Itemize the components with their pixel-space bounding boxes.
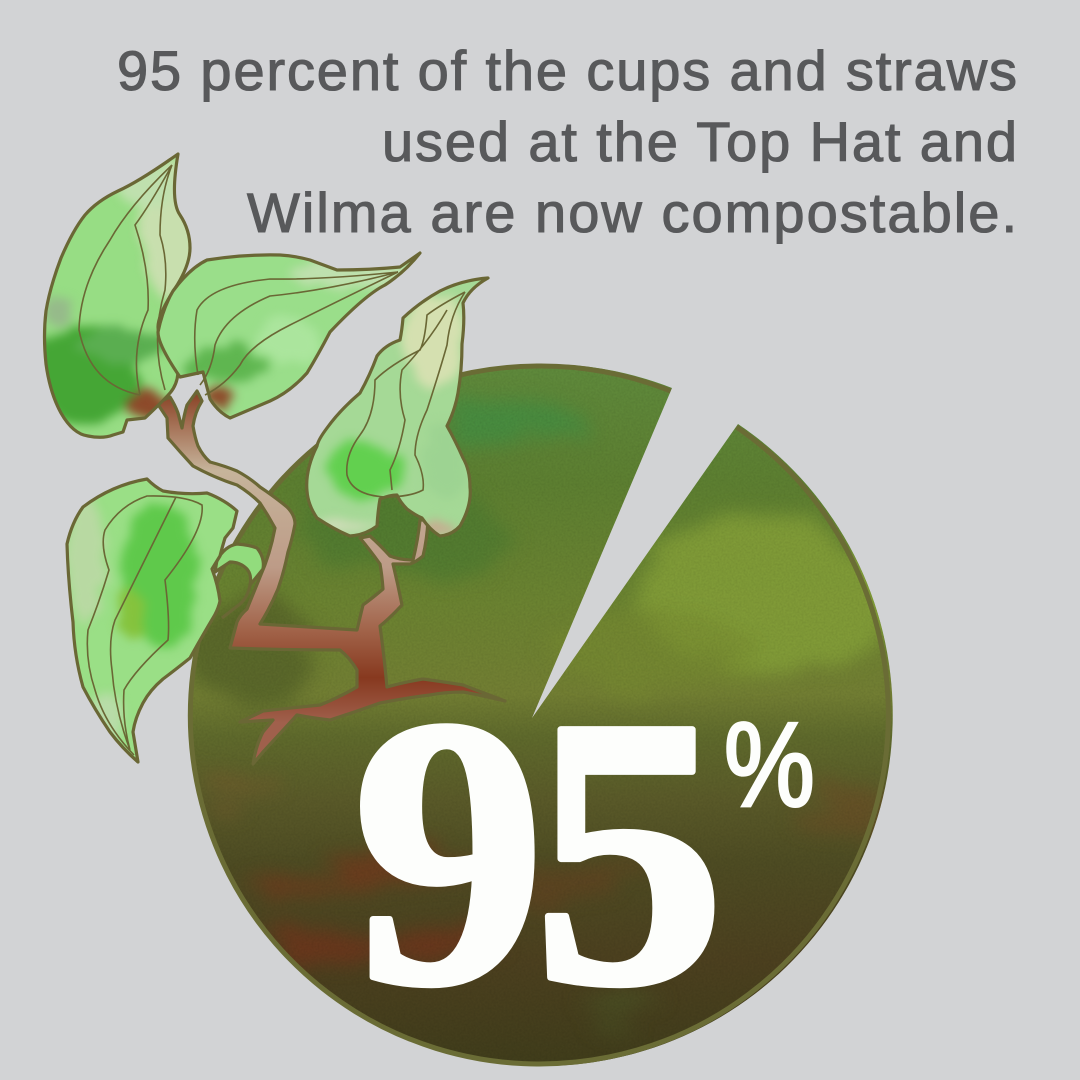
leaf: top right: [156, 251, 422, 420]
leaf: right, over the pie: [300, 270, 495, 545]
pie chart: 95 percent: [180, 360, 900, 1070]
big number: 95%: 95: [353, 640, 725, 1065]
leaf: bottom left: [60, 470, 245, 770]
heading text: [117, 39, 1017, 244]
plant illustration: [30, 140, 505, 770]
heading text: 95 percent of the cups and straws: [117, 39, 1017, 102]
big number: 95%: %: [724, 697, 815, 832]
heading text: used at the Top Hat and: [382, 110, 1017, 173]
curled side stem: [215, 544, 263, 618]
leaf: top left: [42, 152, 192, 439]
stem: [157, 391, 505, 764]
heading text: Wilma are now compostable.: [247, 181, 1017, 244]
